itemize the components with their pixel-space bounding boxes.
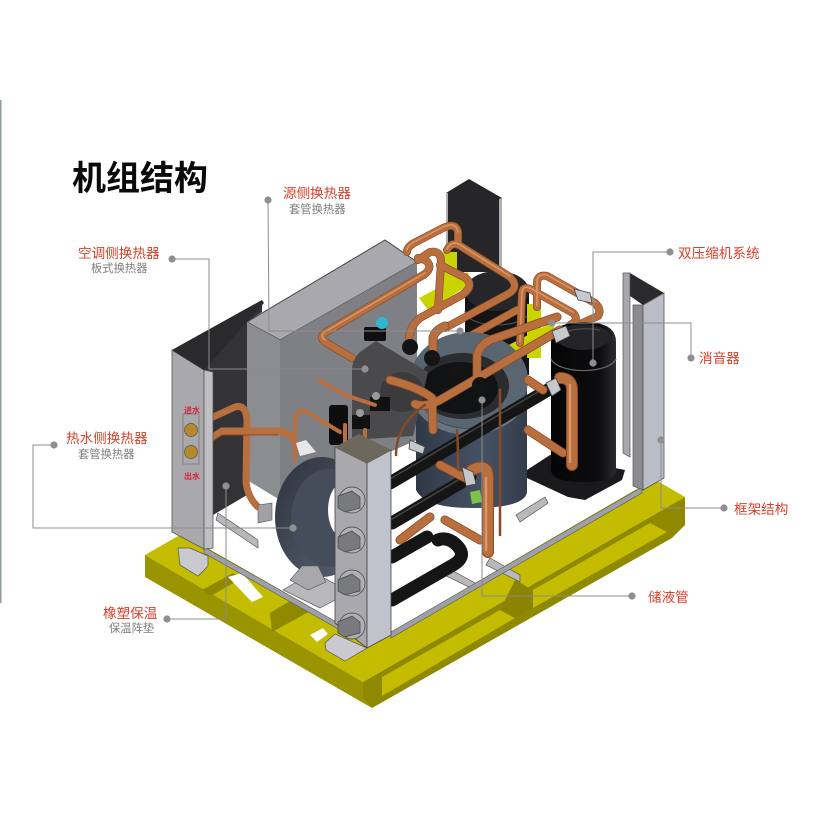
title: 机组结构 xyxy=(72,160,208,198)
source side heat exchanger box xyxy=(247,240,417,500)
frame: left foot bracket xyxy=(178,548,208,576)
label: rubber insulation xyxy=(103,606,158,635)
silver pipe nuts and mufflers xyxy=(409,289,592,486)
label: source side heat exchanger xyxy=(283,186,351,216)
frame: front foot bracket xyxy=(325,634,367,661)
back panel, dark xyxy=(172,300,262,515)
label: rubber insulation: 橡塑保温 xyxy=(103,606,158,621)
label: liquid receiver: 储液管 xyxy=(648,590,689,605)
label: hot water side heat exchanger: 套管换热器 xyxy=(78,447,134,461)
leader: muffler xyxy=(548,319,695,362)
torus hot water heat exchanger xyxy=(258,440,369,590)
label: AC side heat exchanger xyxy=(78,246,160,275)
white floor xyxy=(204,360,660,632)
leader: source side xyxy=(264,196,464,335)
leader: dual compressor xyxy=(589,248,674,367)
label: source side heat exchanger: 源侧换热器 xyxy=(283,186,351,201)
label: AC side heat exchanger: 板式换热器 xyxy=(91,261,148,275)
yellow valve blocks xyxy=(419,252,556,358)
frame: right column xyxy=(623,273,664,490)
leader: insulation xyxy=(163,482,230,623)
back compressor xyxy=(465,271,529,375)
liquid receiver tank xyxy=(410,332,528,508)
label: frame structure: 框架结构 xyxy=(734,502,788,517)
leader: hot water side xyxy=(33,441,297,532)
label: AC side heat exchanger: 空调侧换热器 xyxy=(78,246,160,261)
frame bottom rails xyxy=(204,487,642,638)
label: source side heat exchanger: 套管换热器 xyxy=(289,202,346,216)
compressor xyxy=(527,322,625,500)
green valve xyxy=(470,490,482,504)
back column xyxy=(446,179,502,272)
plate heat exchanger xyxy=(352,341,428,440)
leader: AC side xyxy=(168,255,369,373)
label: hot water side heat exchanger xyxy=(66,431,148,461)
leader: frame xyxy=(657,436,728,512)
frame: left column with water ports xyxy=(172,300,264,549)
front copper pipes xyxy=(390,317,572,552)
expansion valve and filters xyxy=(329,317,488,445)
label: rubber insulation: 保温阵垫 xyxy=(109,621,154,635)
leader: receiver xyxy=(478,396,636,600)
pallet xyxy=(145,370,685,708)
frame: front column with knobs xyxy=(335,434,391,648)
label: dual compressor system: 双压缩机系统 xyxy=(678,246,760,261)
label: muffler: 消音器 xyxy=(699,350,740,366)
pipes at filters xyxy=(213,380,375,507)
floor rails xyxy=(216,497,548,608)
frame: left column with water ports: 进水 xyxy=(184,405,200,415)
label: hot water side heat exchanger: 热水侧换热器 xyxy=(66,431,148,446)
rear copper pipes xyxy=(322,225,599,358)
frame: left column with water ports: 出水 xyxy=(184,471,200,481)
black insulated pipes xyxy=(390,383,553,600)
